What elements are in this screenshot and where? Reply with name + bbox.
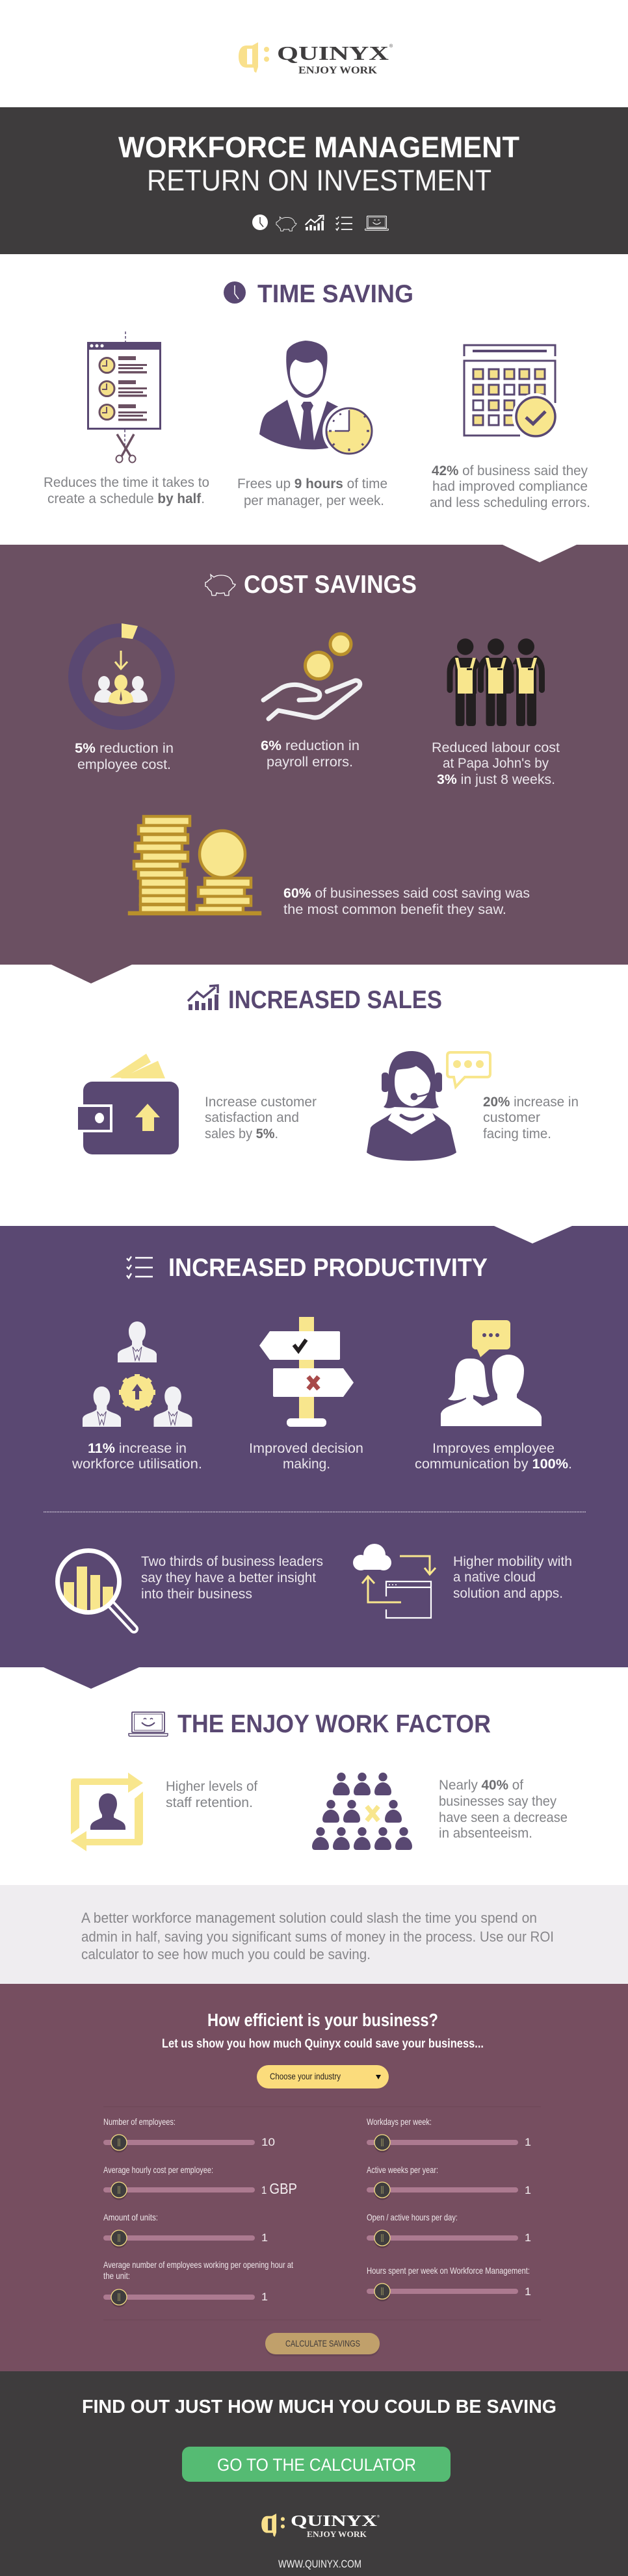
text: customer satisfaction <box>205 1095 317 1141</box>
text: labour cost: at Papa John's by <box>443 756 549 771</box>
slider: active weeks per year: Active weeks per year: <box>367 2165 438 2175</box>
icon: coin stacks <box>129 816 260 914</box>
heading: increased productivity: INCREASED PRODUCTIVITY <box>168 1254 488 1282</box>
text: cloud mobility: a native cloud <box>453 1570 536 1585</box>
text: customer satisfaction: sales by 5%. <box>205 1126 278 1141</box>
text: labour cost: Reduced labour cost <box>432 740 560 755</box>
text: schedule: create a schedule by half. <box>47 491 205 506</box>
heading: cost savings: COST SAVINGS <box>244 571 417 599</box>
text: absenteeism: have seen a decrease <box>439 1810 568 1825</box>
text: payroll errors: payroll errors. <box>267 755 353 770</box>
text: absenteeism <box>439 1778 568 1841</box>
text: decision making <box>249 1441 363 1472</box>
slider: open hours per day: 1 <box>525 2231 531 2244</box>
text: workforce utilisation: 11% increase in <box>88 1441 187 1456</box>
text: compliance: and less scheduling errors. <box>430 495 590 510</box>
text: decision making: Improved decision <box>249 1441 363 1456</box>
icon: three workers <box>450 638 542 726</box>
panel: summary text <box>0 1885 628 1984</box>
text: business insight: say they have a better insight <box>141 1570 316 1585</box>
panel: ROI calculator <box>0 1984 628 2371</box>
panel: summary text: calculator to see how much you could be saving. <box>81 1946 371 1962</box>
text: employee cost: 5% reduction in <box>75 741 174 756</box>
slider: open hours per day <box>367 2212 531 2248</box>
slider: hours on workforce management <box>367 2265 531 2301</box>
slider: hours on workforce management: Hours spent per week on Workforce Management: <box>367 2265 530 2276</box>
text: cloud mobility <box>453 1554 572 1601</box>
heading: time saving: TIME SAVING <box>257 280 413 308</box>
panel: increased sales <box>0 965 628 1226</box>
text: staff retention: staff retention. <box>166 1795 253 1810</box>
calculate savings button: CALCULATE SAVINGS <box>285 2338 360 2348</box>
panel: summary text: admin in half, saving you significant sums of money in the process. Use our ROI <box>81 1929 554 1945</box>
calculator heading: How efficient is your business? <box>207 2010 438 2030</box>
text: schedule <box>44 475 209 506</box>
header logo: ® <box>389 44 393 49</box>
slider: employees per opening hour <box>103 2259 293 2308</box>
text: compliance: 42% of business said they <box>432 463 588 478</box>
header logo <box>239 42 393 76</box>
website url: WWW.QUINYX.COM <box>278 2558 361 2570</box>
text: business insight: Two thirds of business leaders <box>141 1554 323 1569</box>
slider: employees per opening hour: Average number of employees working per opening hour at <box>103 2259 293 2270</box>
text: payroll errors: 6% reduction in <box>261 738 360 753</box>
text: absenteeism: in absenteeism. <box>439 1826 532 1841</box>
text: manager: per manager, per week. <box>244 493 384 508</box>
text: business insight <box>141 1554 323 1602</box>
calculate savings button <box>265 2333 380 2356</box>
text: decision making: making. <box>283 1457 330 1472</box>
button: go to the calculator <box>182 2447 451 2482</box>
icon: signpost <box>259 1317 354 1427</box>
slider: amount of units: 1 <box>261 2231 268 2244</box>
text: customer facing time <box>483 1095 579 1141</box>
text: business insight: into their business <box>141 1587 252 1602</box>
calculator subheading: Let us show you how much Quinyx could save your business... <box>162 2037 484 2051</box>
slider: number of employees <box>103 2116 275 2153</box>
text: customer facing time: 20% increase in <box>483 1095 579 1110</box>
text: labour cost <box>432 740 560 787</box>
header logo: QUINYX <box>277 42 389 64</box>
slider: number of employees: Number of employees: <box>103 2116 176 2127</box>
icon: schedule and scissors <box>87 332 161 463</box>
slider: open hours per day: Open / active hours per day: <box>367 2212 458 2222</box>
slider: workdays per week <box>367 2116 531 2153</box>
text: employee cost: employee cost. <box>77 757 171 772</box>
icon: team with gear <box>83 1321 192 1427</box>
icon row <box>252 215 388 231</box>
slider: amount of units <box>103 2212 268 2248</box>
panel: the enjoy work factor <box>0 1689 628 1885</box>
slider: average hourly cost: Average hourly cost per employee: <box>103 2165 213 2175</box>
text: staff retention: Higher levels of <box>166 1779 257 1794</box>
footer logo: ENJOY WORK <box>307 2529 367 2539</box>
panel: increased productivity <box>0 1226 628 1689</box>
text: common benefit: the most common benefit they saw. <box>283 902 506 917</box>
text: employee communication: Improves employee <box>432 1441 555 1456</box>
text: schedule: Reduces the time it takes to <box>44 475 209 490</box>
header logo: ENJOY WORK <box>298 65 378 76</box>
text: customer satisfaction: satisfaction and <box>205 1110 299 1125</box>
text: common benefit: 60% of businesses said cost saving was <box>283 886 530 901</box>
panel: footer call to action <box>0 2371 628 2576</box>
donut chart: 5% reduction <box>75 623 168 723</box>
text: compliance <box>430 463 590 510</box>
slider: amount of units: Amount of units: <box>103 2212 158 2222</box>
text: employee communication <box>415 1441 572 1472</box>
slider: workdays per week: 1 <box>525 2136 531 2148</box>
text: employee communication: communication by 100%. <box>415 1457 572 1472</box>
slider: average hourly cost <box>103 2165 297 2200</box>
icon: magnifier with bar chart <box>57 1551 134 1629</box>
text: employee cost <box>75 741 174 772</box>
icon: hand with coins <box>263 634 360 719</box>
panel: title banner <box>0 107 628 254</box>
icon: calendar with check badge <box>464 345 559 440</box>
icon: wallet <box>78 1054 179 1154</box>
industry dropdown: Choose your industry <box>270 2071 341 2081</box>
text: customer satisfaction: Increase customer <box>205 1095 317 1110</box>
text: absenteeism: Nearly 40% of <box>439 1778 523 1793</box>
footer logo: ® <box>377 2514 380 2519</box>
industry dropdown <box>257 2065 389 2088</box>
text: workforce utilisation <box>72 1441 202 1472</box>
text: manager <box>237 476 387 508</box>
text: customer facing time: facing time. <box>483 1126 551 1141</box>
footer logo: QUINYX <box>291 2513 378 2530</box>
icon: manager with clock <box>259 341 376 458</box>
slider: average hourly cost: 1 GBP <box>261 2180 297 2197</box>
text: compliance: had improved compliance <box>432 479 588 494</box>
text: cloud mobility: Higher mobility with <box>453 1554 572 1569</box>
icon: cloud sync <box>353 1544 436 1618</box>
heading: the enjoy work factor: THE ENJOY WORK FACTOR <box>177 1710 491 1738</box>
icon: customer agent with speech bubble <box>367 1051 490 1161</box>
footer heading: FIND OUT JUST HOW MUCH YOU COULD BE SAVING <box>82 2397 556 2417</box>
heading: increased sales: INCREASED SALES <box>228 986 442 1014</box>
text: absenteeism: businesses say they <box>439 1794 556 1809</box>
text: payroll errors <box>261 738 360 770</box>
footer logo <box>261 2513 380 2539</box>
button: go to the calculator: GO TO THE CALCULATOR <box>217 2455 416 2475</box>
text: workforce utilisation: workforce utilisation. <box>72 1457 202 1472</box>
text: customer facing time: customer <box>483 1110 540 1125</box>
slider: active weeks per year: 1 <box>525 2184 531 2196</box>
subtitle: RETURN ON INVESTMENT <box>147 164 491 197</box>
title: WORKFORCE MANAGEMENT <box>118 131 519 164</box>
slider: hours on workforce management: 1 <box>525 2285 531 2298</box>
slider: workdays per week: Workdays per week: <box>367 2116 432 2127</box>
icon: people grid with absence <box>312 1773 412 1850</box>
text: manager: Frees up 9 hours of time <box>237 476 387 491</box>
text: cloud mobility: solution and apps. <box>453 1586 563 1601</box>
panel: time saving <box>0 254 628 545</box>
slider: active weeks per year <box>367 2165 531 2200</box>
slider: employees per opening hour: 1 <box>261 2291 268 2303</box>
icon: people communicating <box>441 1320 542 1426</box>
panel: cost savings <box>0 545 628 983</box>
text: labour cost: 3% in just 8 weeks. <box>437 772 555 787</box>
slider: employees per opening hour: the unit: <box>103 2270 130 2281</box>
icon: retention arrows <box>71 1773 143 1851</box>
slider: number of employees: 10 <box>261 2136 275 2148</box>
text: staff retention <box>166 1779 257 1810</box>
panel: summary text: A better workforce management solution could slash the time you spend on <box>81 1910 537 1926</box>
text: common benefit <box>283 886 530 917</box>
